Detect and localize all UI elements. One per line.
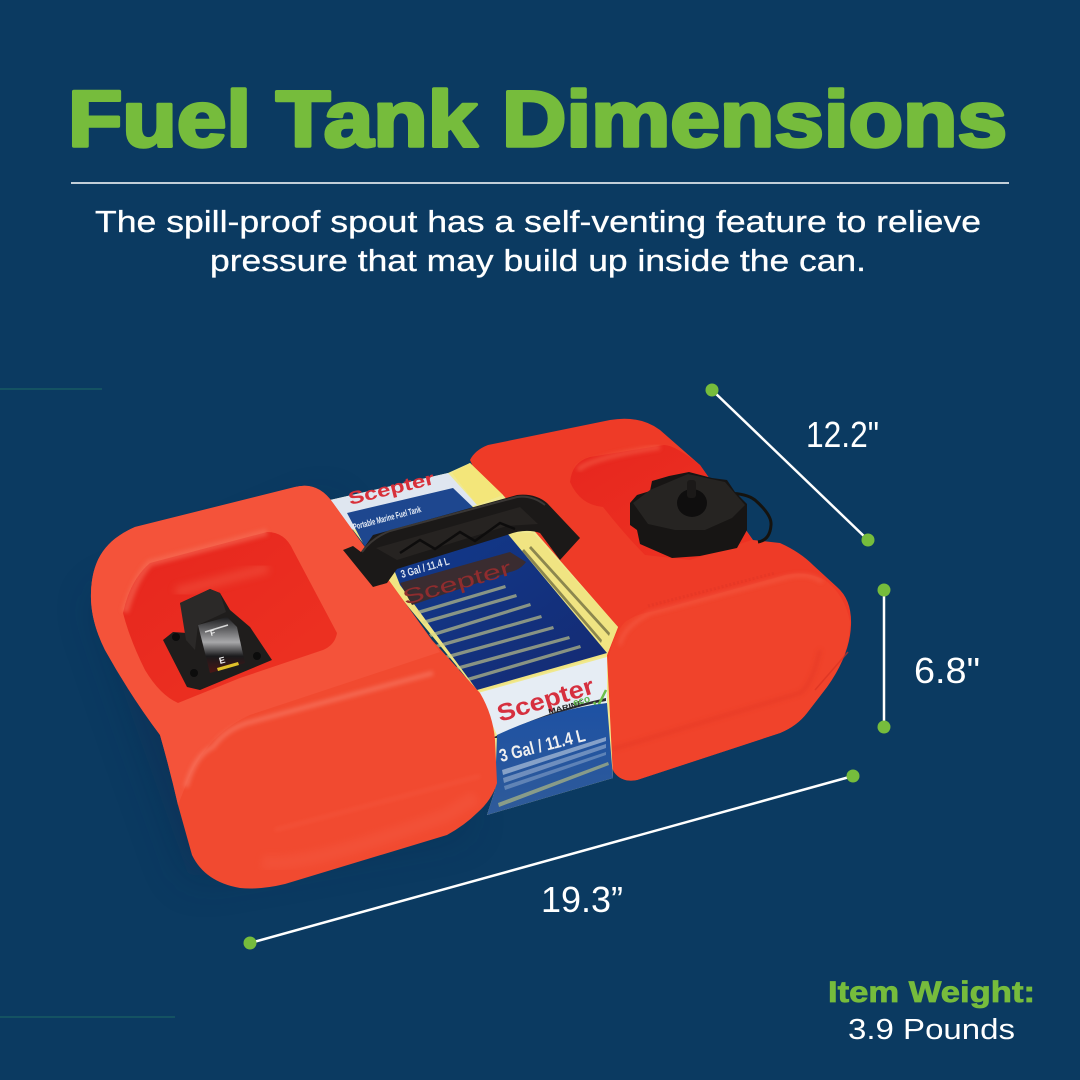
label strip behind handle: Scepter [494,673,597,728]
label strip behind handle: Scepter [346,468,436,509]
dimension: length 19.3: 19.3” [541,879,623,920]
label strip behind handle: 3 Gal / 11.4 L [400,556,451,581]
dimension: height 6.8 [878,584,980,734]
fuel gauge: E [218,655,226,666]
subtitle: The spill-proof spout has a self-venting feature to relieve [95,204,981,239]
item weight: Item Weight: [828,976,1035,1009]
label strip behind handle: Portable Marine Fuel Tank [352,504,423,532]
label strip behind handle: Scepter [400,557,514,610]
dimension: length 19.3 [244,770,860,950]
subtitle: pressure that may build up inside the can. [210,243,866,278]
label strip behind handle: eco [572,694,591,709]
subtitle [95,204,981,278]
dimension: height 6.8: 6.8" [914,650,980,691]
title: Fuel Tank Dimensions [68,74,1007,163]
item weight [828,976,1035,1046]
fuel gauge: F [209,628,216,638]
carry handle [343,495,580,587]
item weight: 3.9 Pounds [848,1014,1015,1046]
label strip behind handle: MARINE [548,700,585,716]
tank right section [470,419,851,781]
fuel tank [91,419,851,888]
label strip behind handle: 3 Gal / 11.4 L [497,725,587,766]
dimension: width 12.2 [706,384,879,546]
tank drop shadow [92,500,470,880]
dimension: width 12.2: 12.2" [806,414,879,455]
fuel gauge [163,589,272,690]
tank left section [91,486,497,888]
fuel cap [630,472,771,558]
label strip behind handle [330,463,618,815]
